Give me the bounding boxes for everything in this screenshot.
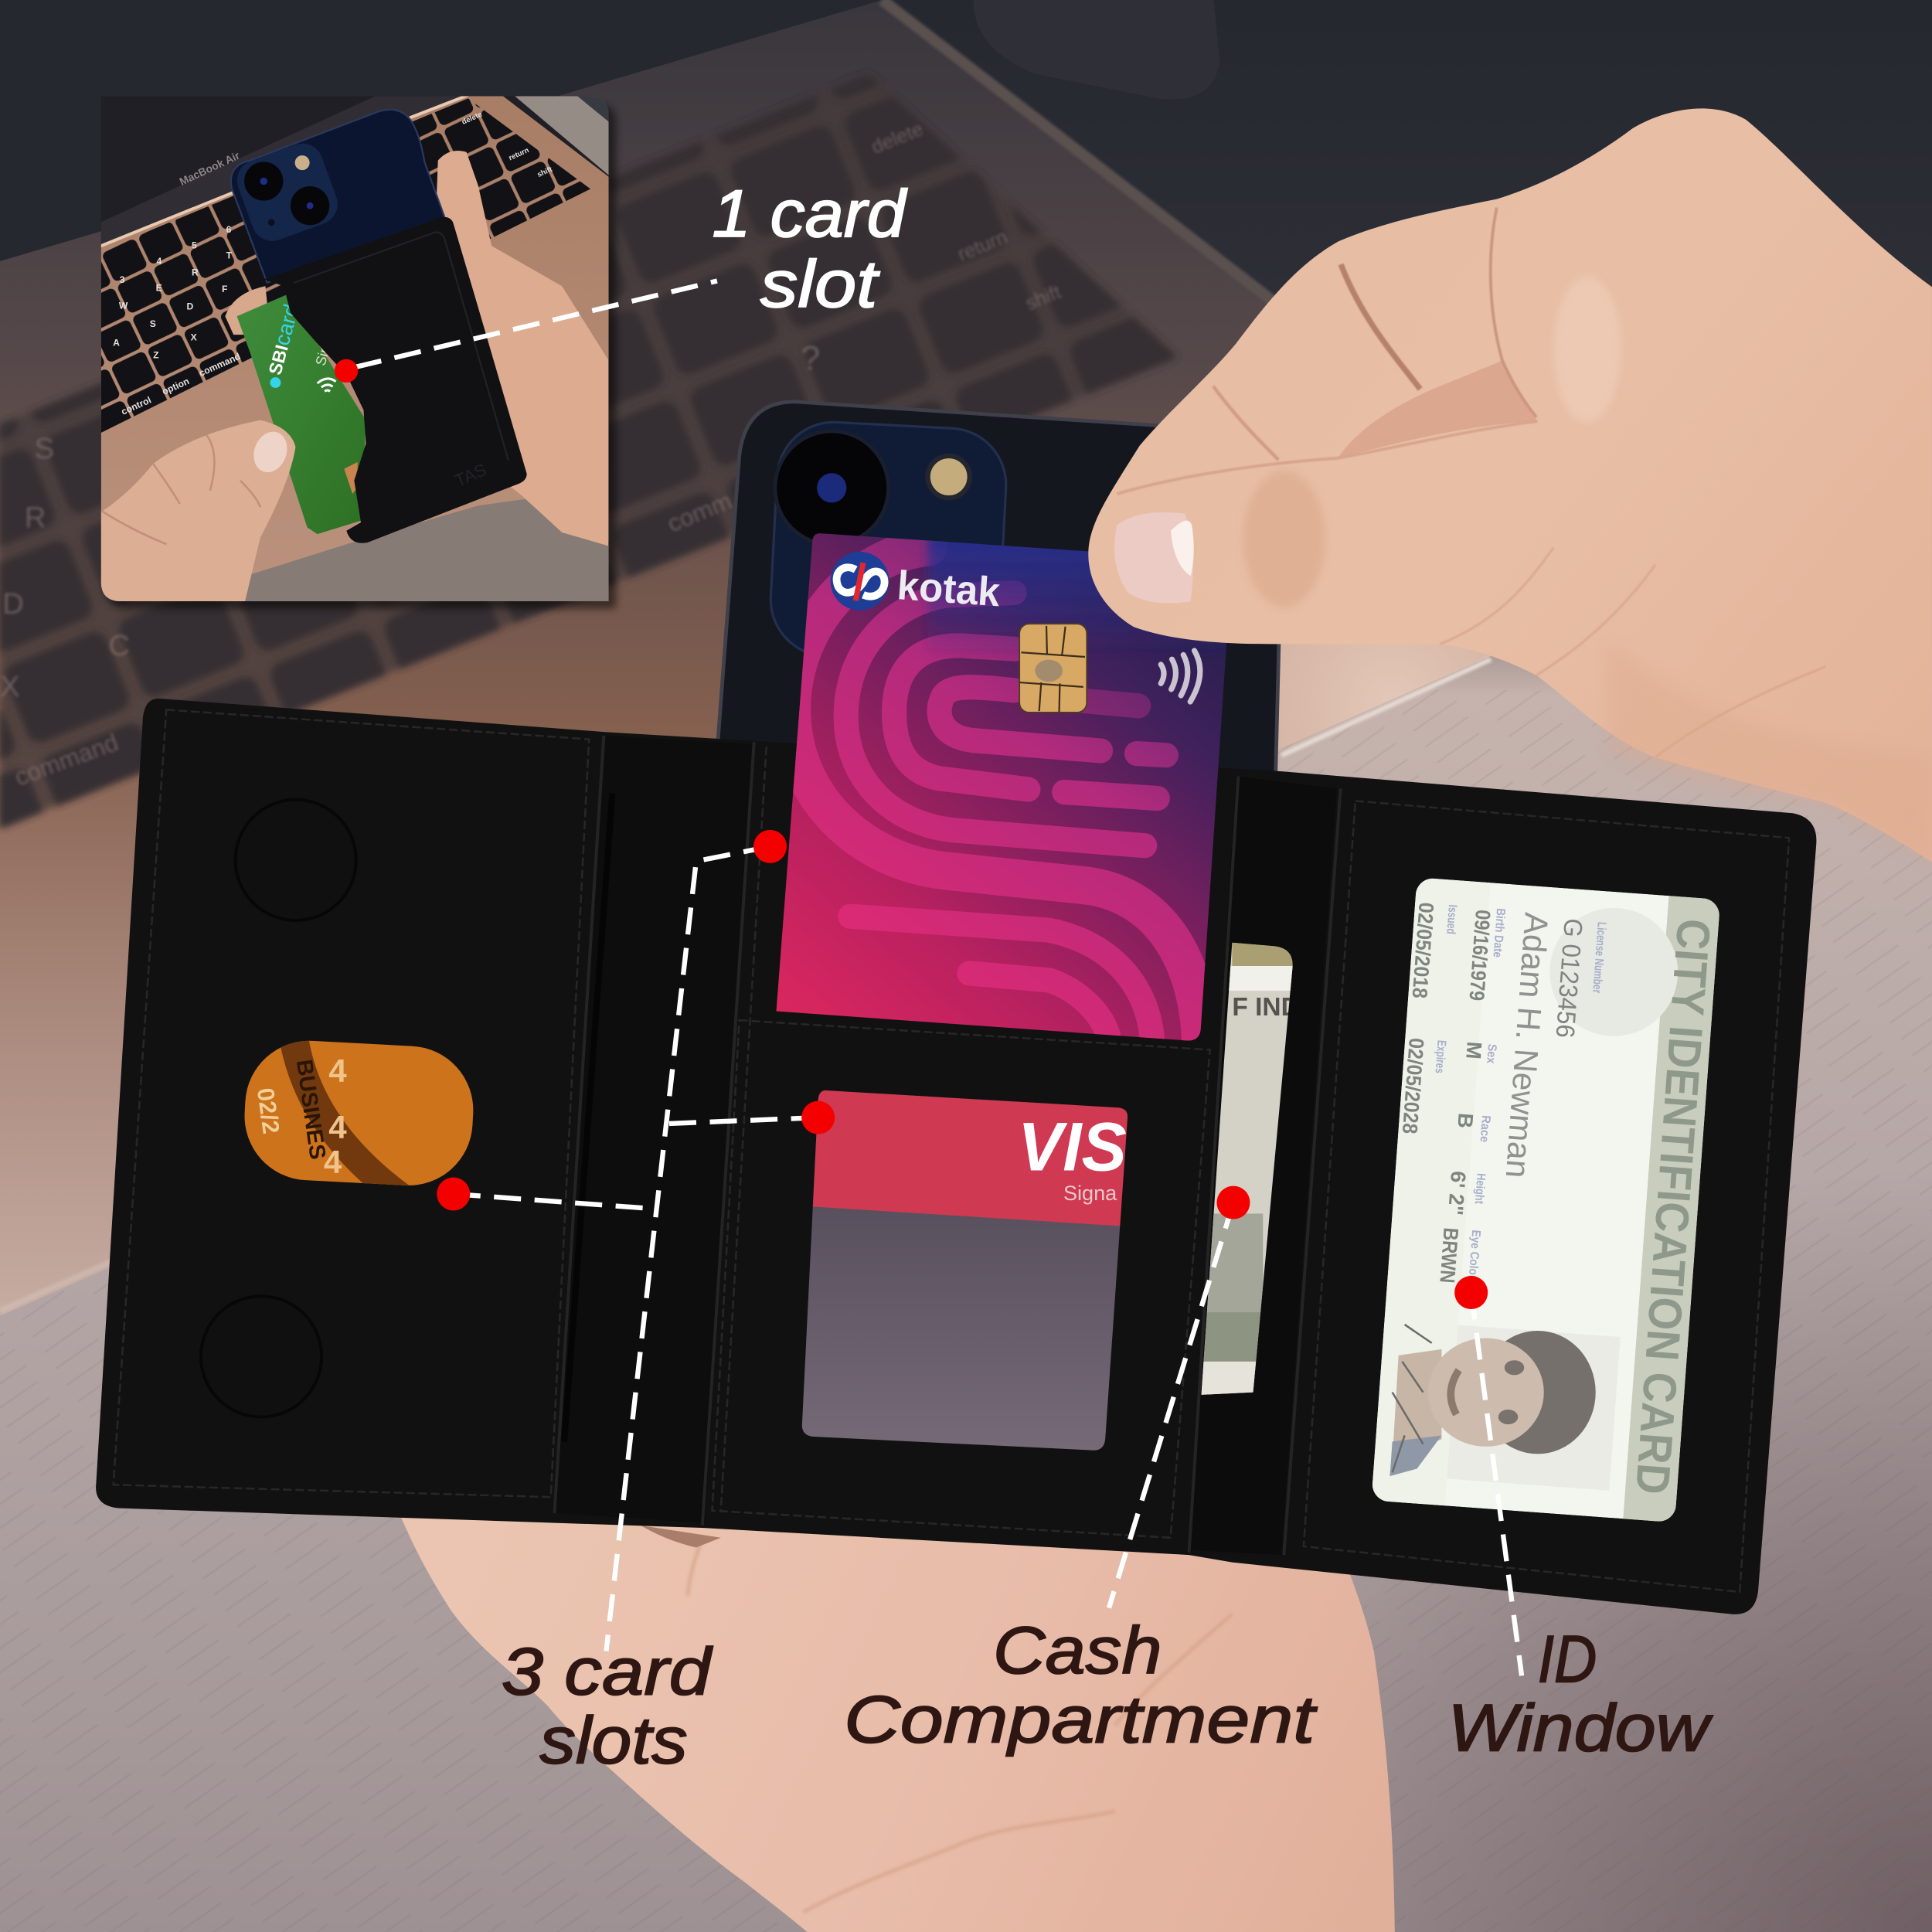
visa card in window pocket: Signa bbox=[1063, 1181, 1117, 1205]
orange card in thumb window bbox=[244, 1040, 473, 1185]
inset: table bbox=[240, 497, 629, 621]
label: 3 card slots: slots bbox=[539, 1704, 688, 1778]
panel: inset photo of phone with 1 card slot: 5 bbox=[192, 240, 197, 251]
label: 1 card slot: 1 card bbox=[713, 177, 908, 251]
panel: inset photo of phone with 1 card slot: command bbox=[197, 351, 242, 379]
visa card in window pocket: VISA bbox=[1018, 1108, 1175, 1185]
panel: inset photo of phone with 1 card slot: TAS bbox=[452, 460, 489, 491]
label: cash compartment: Compartment bbox=[844, 1682, 1318, 1757]
panel: inset photo of phone with 1 card slot: control bbox=[120, 394, 153, 417]
orange card in thumb window: 4 bbox=[328, 1053, 347, 1089]
orange card in thumb window: 4 bbox=[324, 1144, 342, 1180]
cash note in compartment: F INDI bbox=[1232, 993, 1307, 1022]
card: kotak wordmark: kotak bbox=[896, 563, 1002, 615]
inset: black wallet bbox=[264, 217, 527, 543]
marker dot: card slot 2 bbox=[801, 1101, 835, 1134]
panel: inset photo of phone with 1 card slot: A bbox=[113, 337, 120, 348]
wallet: centre pocket shade bbox=[554, 736, 754, 1523]
icon: upper magnet circle bbox=[236, 800, 356, 920]
id card: printed text: G 0123456 bbox=[1550, 917, 1587, 1039]
id card: printed text: Sex bbox=[1484, 1043, 1498, 1064]
inset: keyboard bbox=[93, 98, 590, 437]
label: id window: ID bbox=[1538, 1622, 1597, 1696]
panel: inset photo of phone with 1 card slot: option bbox=[161, 376, 191, 397]
icon: lower magnet circle bbox=[201, 1296, 321, 1417]
hand: thumb and fingers holding card bbox=[1088, 108, 1932, 862]
label: 3 card slots: 3 card bbox=[502, 1634, 713, 1709]
id card: name: Adam H. Newman bbox=[1498, 911, 1555, 1179]
label: 1 card slot bbox=[713, 177, 908, 321]
inset: SBI card wordmark: SBIcard bbox=[262, 301, 304, 377]
icon: thumbnail bbox=[1114, 512, 1193, 603]
panel: inset photo of phone with 1 card slot: F bbox=[222, 284, 227, 294]
card: contactless icon bbox=[1161, 651, 1200, 702]
panel: inset photo of phone with 1 card slot: D bbox=[186, 301, 193, 312]
label: id window: Window bbox=[1447, 1692, 1713, 1766]
label: cash compartment bbox=[844, 1614, 1318, 1757]
label: 3 card slots bbox=[502, 1634, 713, 1778]
inset: left hand bbox=[93, 420, 295, 621]
id card: portrait photo bbox=[1389, 1325, 1596, 1476]
inset: green SBI card: Simp bbox=[313, 332, 336, 367]
id card: printed text: License Number bbox=[1590, 921, 1608, 994]
background: blurred laptop: R bbox=[25, 501, 46, 534]
marker dot: card slot 3 bbox=[437, 1177, 470, 1210]
icon: camera flash bbox=[928, 456, 970, 498]
callout line: cash compartment bbox=[1109, 1202, 1233, 1608]
marker dot: card slot 1 bbox=[753, 830, 787, 863]
inset: laptop screen bbox=[100, 96, 526, 511]
inset photo shadow bbox=[108, 104, 616, 609]
panel: inset photo of phone with 1 card slot: Z bbox=[153, 349, 159, 360]
panel: inset photo of phone with 1 card slot: delete bbox=[461, 111, 484, 127]
id card: printed text: 02/05/2028 bbox=[1398, 1037, 1429, 1134]
id card: printed text: Eye Color bbox=[1466, 1230, 1482, 1280]
hand: shaded pocket between fingers bbox=[1338, 361, 1538, 458]
label: id window bbox=[1447, 1622, 1713, 1766]
icon: camera lens bbox=[775, 431, 889, 545]
hand: lower palm bbox=[400, 1513, 1395, 1932]
wallet: right fold shade bbox=[1189, 776, 1337, 1555]
panel: inset photo of phone with 1 card slot: W bbox=[119, 301, 128, 311]
id card: printed text bbox=[1398, 902, 1720, 1496]
kotak credit card bbox=[773, 530, 1239, 1044]
card: kotak logo bbox=[831, 552, 889, 611]
background: blurred laptop: C bbox=[108, 629, 130, 662]
background: blurred laptop: delete bbox=[869, 118, 927, 158]
background: blurred laptop: ? bbox=[801, 339, 820, 377]
id card: printed text: 09/16/1979 bbox=[1464, 909, 1495, 1002]
id card: printed text: BRWN bbox=[1435, 1227, 1464, 1284]
background: blurred laptop bbox=[0, 0, 1493, 1315]
background: blurred laptop: command bbox=[11, 728, 122, 791]
phone behind wallet bbox=[717, 402, 1284, 788]
id card: printed text: Issued bbox=[1444, 904, 1459, 934]
callout line: id window bbox=[1471, 1293, 1522, 1675]
id card: printed text: B bbox=[1453, 1112, 1478, 1129]
wallet: open leather body bbox=[96, 699, 1816, 1614]
card: curved pink stripes bbox=[792, 547, 1201, 1040]
id card: printed text: Race bbox=[1477, 1115, 1492, 1143]
hand: light scuffed skin bbox=[1553, 276, 1621, 423]
id card in window bbox=[1371, 877, 1720, 1522]
background: blurred laptop: return bbox=[954, 226, 1011, 266]
inset: right hand bbox=[428, 151, 608, 546]
background: blurred laptop: X bbox=[0, 670, 20, 703]
panel: inset photo of phone with 1 card slot: 3 bbox=[120, 274, 125, 285]
hand: creases bbox=[1117, 208, 1825, 757]
background: blurred laptop: shift bbox=[1022, 281, 1064, 315]
marker dot: cash bbox=[1216, 1186, 1250, 1219]
id card: printed text: Birth Date bbox=[1491, 908, 1507, 958]
id card: printed text: Expires bbox=[1433, 1039, 1448, 1074]
panel: inset photo of phone with 1 card slot: E bbox=[156, 283, 162, 294]
inset: phone bbox=[231, 110, 444, 283]
panel: inset photo of phone with 1 card slot: T bbox=[226, 250, 233, 261]
panel: inset photo of phone with 1 card slot: shift bbox=[536, 165, 554, 179]
panel: inset photo of phone with 1 card slot: X bbox=[191, 332, 197, 342]
label: cash compartment: Cash bbox=[993, 1614, 1162, 1688]
inset: laptop deck bbox=[93, 95, 629, 621]
orange card in thumb window: BUSINES bbox=[291, 1058, 331, 1162]
cash note in compartment bbox=[1201, 943, 1293, 1395]
background: blurred laptop: S bbox=[35, 432, 54, 465]
callout lines: 3 card slots bbox=[454, 846, 818, 1651]
panel: inset photo of phone with 1 card slot: return bbox=[508, 146, 531, 162]
id card: printed text: 02/05/2018 bbox=[1408, 902, 1439, 999]
panel: inset photo of phone with 1 card slot: MacBook Air bbox=[177, 148, 242, 188]
panel: inset photo of phone with 1 card slot: 6 bbox=[226, 224, 232, 235]
marker dot: 1 card slot bbox=[335, 359, 358, 383]
orange card in thumb window: 02/2 bbox=[252, 1087, 284, 1135]
visa card in window pocket bbox=[802, 1090, 1128, 1451]
orange card in thumb window: 4 bbox=[328, 1109, 347, 1145]
panel: inset photo of phone with 1 card slot: R bbox=[192, 267, 199, 277]
panel: inset photo of phone with 1 card slot: S bbox=[150, 318, 156, 329]
background: blurred laptop: comm bbox=[663, 486, 736, 537]
id card: printed text: M bbox=[1461, 1041, 1487, 1060]
inset: green SBI card bbox=[237, 294, 366, 534]
callout line: 1 card slot bbox=[355, 281, 717, 367]
id card: printed text: 6' 2" bbox=[1444, 1170, 1471, 1216]
marker dot: id window bbox=[1454, 1276, 1488, 1309]
card: chip bbox=[1019, 624, 1087, 713]
panel: inset photo of phone with 1 card slot bbox=[93, 85, 629, 621]
id card: printed text: Height bbox=[1472, 1173, 1488, 1205]
label: 1 card slot: slot bbox=[760, 247, 880, 321]
id card: title band: CITY IDENTIFICATION CARD bbox=[1626, 917, 1720, 1496]
background: blurred laptop: D bbox=[2, 587, 24, 621]
hand: thumb knuckle wrinkles bbox=[1243, 471, 1325, 607]
panel: inset photo of phone with 1 card slot: 4 bbox=[156, 256, 162, 267]
